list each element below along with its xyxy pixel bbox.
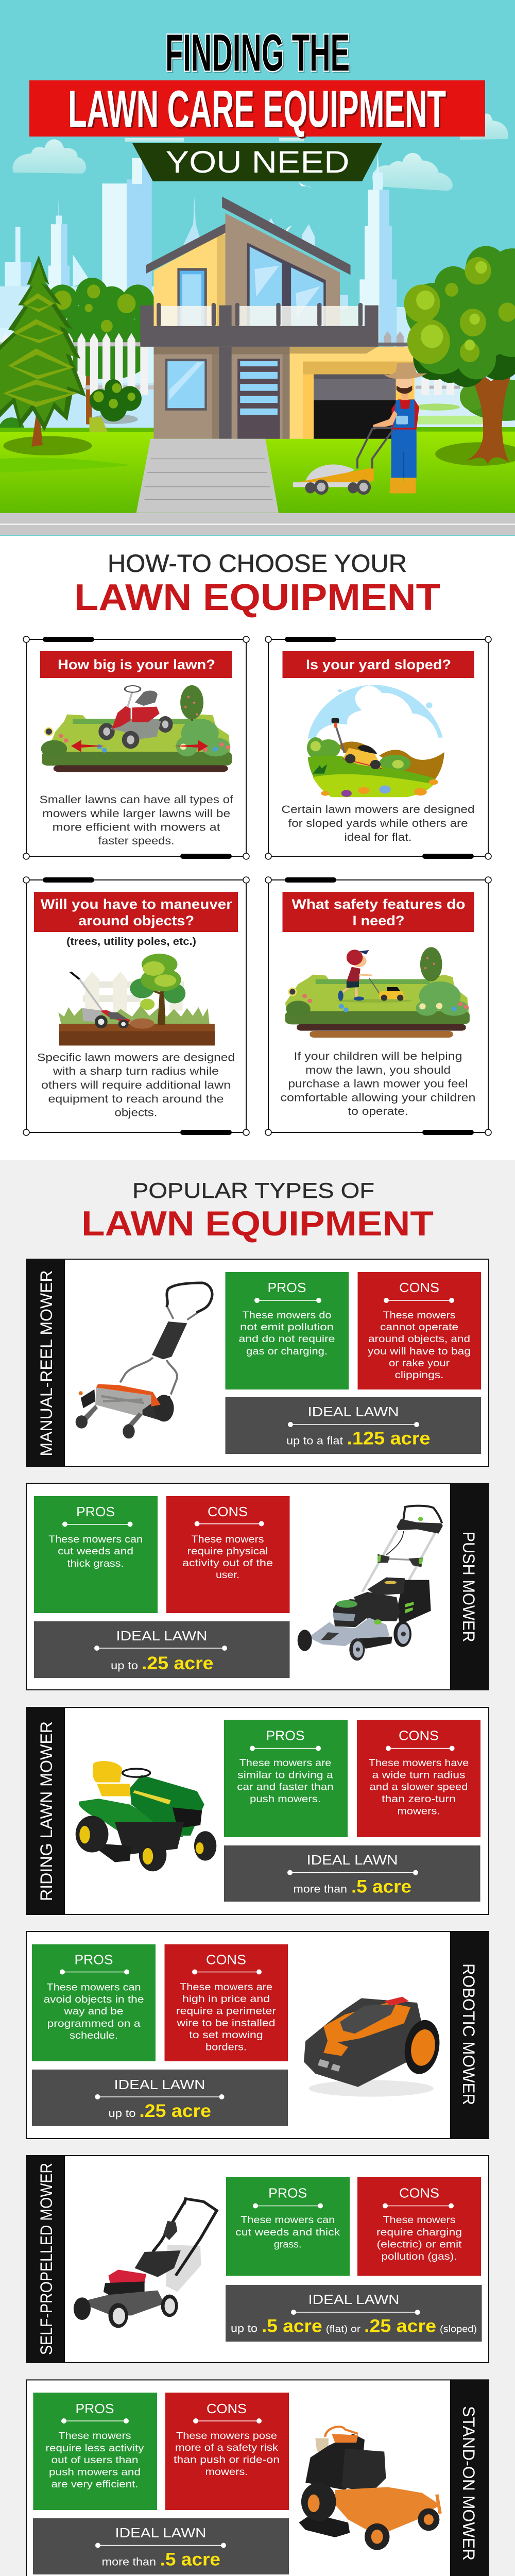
pros: [226, 2177, 350, 2276]
gray section background: [0, 1160, 515, 2576]
panel: robotic mower: [26, 1931, 489, 2139]
body text: more efficient with mowers at: [53, 821, 220, 834]
side label: PUSH MOWER: [459, 1531, 478, 1642]
cons: and a slower speed: [370, 1782, 468, 1793]
cons: require charging: [376, 2227, 462, 2238]
pros: PROS: [75, 2401, 114, 2416]
ideal lawn: (flat) or: [326, 2324, 360, 2334]
right fence: [416, 376, 460, 395]
mower image: [76, 1761, 216, 1871]
cons: CONS: [399, 1727, 439, 1743]
ideal lawn: .25 acre: [139, 2101, 211, 2121]
side label: RIDING LAWN MOWER: [37, 1721, 56, 1901]
section heading: how-to choose: [74, 550, 440, 618]
body text: equipment to reach around the: [48, 1093, 224, 1105]
panel: riding lawn mower: [26, 1707, 489, 1915]
cons: [357, 1272, 481, 1389]
ideal lawn: IDEAL LAWN: [308, 1404, 399, 1419]
body text: objects.: [114, 1107, 158, 1119]
arrow: left: [71, 740, 106, 752]
ideal lawn: [226, 2285, 482, 2342]
side label: [26, 1259, 65, 1467]
side label: MANUAL-REEL MOWER: [37, 1270, 56, 1456]
pros: not emit pollution: [240, 1321, 334, 1333]
pros: These mowers can: [241, 2214, 335, 2226]
body text: with a sharp turn radius while: [53, 1065, 219, 1077]
ideal lawn: more than: [294, 1884, 347, 1895]
header: [282, 892, 474, 932]
ideal lawn: IDEAL LAWN: [116, 1628, 207, 1643]
cons: These mowers: [383, 1310, 456, 1321]
pros: These mowers are: [239, 1757, 331, 1769]
pros: gas or charging.: [246, 1346, 328, 1357]
pros: push mowers.: [250, 1793, 321, 1805]
cons: user.: [216, 1569, 239, 1581]
back bush and tree: [46, 278, 159, 425]
side label: ROBOTIC MOWER: [459, 1963, 478, 2105]
panel: manual-reel mower: [26, 1259, 489, 1467]
pros: cut weeds and: [58, 1546, 133, 1557]
pine tree: [0, 256, 86, 447]
pros: and do not require: [239, 1333, 335, 1345]
pros: These mowers do: [242, 1310, 332, 1321]
pros: [224, 1720, 348, 1837]
small left bush: [0, 417, 30, 448]
body text: [37, 1052, 235, 1119]
cons: than zero-turn: [382, 1793, 456, 1805]
mower image: [299, 2427, 440, 2550]
hero illustration: [0, 0, 515, 536]
cons: [357, 2177, 481, 2276]
panel: is your yard sloped: [265, 636, 491, 859]
panel: self-propelled mower: [26, 2155, 489, 2363]
arrow: right: [174, 740, 208, 752]
mower image: [298, 1506, 443, 1660]
clouds: [13, 113, 508, 191]
ribbon: [132, 143, 382, 181]
cons: require a perimeter: [176, 2006, 277, 2017]
cons: mowers.: [398, 1805, 440, 1817]
ideal lawn: IDEAL LAWN: [308, 2292, 400, 2307]
cons: borders.: [205, 2042, 247, 2053]
mower image: [76, 1283, 212, 1438]
cons: CONS: [206, 1952, 246, 1968]
ideal lawn: .125 acre: [347, 1429, 431, 1449]
pros: PROS: [268, 2185, 307, 2200]
mower image: [304, 1997, 443, 2097]
side label: [26, 2155, 65, 2363]
ideal lawn: [32, 2070, 288, 2126]
cons: CONS: [207, 2401, 247, 2416]
pros: These mowers can: [46, 1982, 141, 1993]
pros: push mowers and: [49, 2467, 141, 2478]
ideal lawn: up to: [231, 2323, 258, 2335]
pros: These mowers can: [48, 1534, 143, 1545]
section heading: how-to choose: HOW-TO CHOOSE YOUR: [108, 550, 407, 578]
body text: others will require additional lawn: [41, 1079, 231, 1091]
question: [291, 896, 466, 928]
ideal lawn: IDEAL LAWN: [307, 1852, 398, 1868]
panel: how big is your lawn: [23, 636, 249, 859]
header: [40, 651, 232, 678]
header: [34, 892, 238, 932]
birds: [272, 182, 312, 236]
cons: clippings.: [394, 1369, 444, 1381]
body text: [280, 1050, 476, 1117]
panel: safety features: [265, 877, 491, 1136]
body text: Smaller lawns can have all types of: [40, 794, 233, 806]
pros: avoid objects in the: [43, 1994, 144, 2005]
question: Will you have to maneuver: [41, 896, 232, 912]
ideal lawn: IDEAL LAWN: [114, 2077, 205, 2092]
pros: require less activity: [45, 2443, 144, 2454]
question: [41, 896, 232, 928]
side label: [450, 1483, 489, 1690]
section heading: popular types: [81, 1178, 434, 1243]
question: What safety features do: [291, 896, 466, 912]
illustration: riding mower on lawn: [41, 685, 232, 772]
side label: [450, 2379, 489, 2576]
cons: These mowers are: [180, 1981, 272, 1993]
body text: ideal for flat.: [344, 832, 412, 843]
pros: programmed on a: [47, 2018, 141, 2029]
panel: stand-on mower: [26, 2379, 489, 2576]
ideal lawn: [33, 2518, 289, 2574]
cons: or rake your: [389, 1358, 450, 1369]
ideal lawn: (sloped): [440, 2324, 477, 2334]
cons: CONS: [399, 1280, 439, 1295]
cons: These mowers have: [369, 1757, 469, 1769]
ideal lawn: .5 acre: [160, 2549, 220, 2570]
road: [0, 513, 515, 535]
ideal lawn: .25 acre: [142, 1653, 213, 1673]
ideal lawn: [226, 1397, 481, 1454]
cons: around objects, and: [368, 1333, 470, 1345]
pros: out of users than: [52, 2454, 138, 2466]
ideal lawn: [34, 1621, 289, 1678]
body text: Specific lawn mowers are designed: [37, 1052, 235, 1063]
body text: [40, 794, 233, 847]
side label: [450, 1931, 489, 2139]
body text: mowers while larger lawns will be: [42, 808, 230, 820]
title line: finding the: FINDING THE: [165, 24, 350, 82]
body text: for sloped yards while others are: [288, 818, 468, 829]
body text: [281, 804, 475, 843]
body text: If your children will be helping: [294, 1050, 462, 1062]
cons: [165, 1944, 288, 2061]
body text: Certain lawn mowers are designed: [281, 804, 475, 816]
panel: maneuver around objects: [23, 877, 249, 1136]
body text: mow the lawn, you should: [305, 1064, 451, 1076]
section heading: popular types: POPULAR TYPES OF: [132, 1178, 374, 1202]
front bush: [90, 379, 142, 424]
ideal lawn: IDEAL LAWN: [115, 2525, 206, 2540]
pros: are very efficient.: [52, 2479, 138, 2490]
title banner: [29, 80, 485, 137]
pros: PROS: [74, 1952, 113, 1968]
pros: [226, 1272, 349, 1389]
cons: a wide turn radius: [372, 1769, 466, 1781]
pros: [33, 2393, 157, 2510]
side label: [26, 1707, 65, 1915]
ideal lawn: more than: [102, 2556, 156, 2568]
cons: wire to be installed: [176, 2018, 275, 2029]
illustration: child mowing: [285, 947, 470, 1038]
pros: car and faster than: [237, 1782, 334, 1793]
ideal lawn: [224, 1845, 480, 1902]
cons: activity out of the: [182, 1557, 273, 1569]
cons: mowers.: [205, 2466, 248, 2478]
body text: faster speeds.: [98, 835, 175, 847]
mower image: [74, 2199, 217, 2328]
pros: PROS: [268, 1280, 306, 1295]
house: [140, 197, 415, 439]
cons: pollution (gas).: [381, 2251, 457, 2262]
pros: similar to driving a: [237, 1769, 333, 1781]
pros: thick grass.: [67, 1558, 124, 1569]
pros: [32, 1944, 156, 2061]
cons: These mowers: [383, 2214, 456, 2226]
side label: STAND-ON MOWER: [459, 2406, 478, 2561]
illustration: mower on slope: [307, 685, 444, 797]
pros: PROS: [266, 1727, 305, 1743]
lawn: [0, 428, 515, 513]
ideal lawn: .5 acre: [351, 1877, 411, 1897]
section heading: popular types: LAWN EQUIPMENT: [81, 1204, 434, 1243]
side label: SELF-PROPELLED MOWER: [37, 2163, 56, 2355]
cons: [166, 1496, 289, 1613]
title line: you need: YOU NEED: [166, 145, 349, 179]
skyline: [0, 152, 515, 431]
ideal lawn: .25 acre: [364, 2316, 436, 2336]
body text: purchase a lawn mower you feel: [288, 1078, 468, 1090]
cons: high in price and: [182, 1993, 270, 2005]
pros: way and be: [63, 2006, 124, 2017]
fence: [0, 333, 154, 395]
ideal lawn: up to: [111, 1660, 138, 1672]
pros: schedule.: [70, 2030, 118, 2041]
cons: cannot operate: [380, 1321, 458, 1333]
question: I need?: [352, 913, 405, 928]
note: (trees, utility poles, etc.): [66, 936, 196, 947]
cons: [357, 1720, 480, 1837]
pros: grass.: [274, 2239, 302, 2250]
pros: cut weeds and thick: [235, 2227, 340, 2238]
panel: push mower: [26, 1483, 489, 1690]
cons: These mowers: [192, 1534, 264, 1545]
question: around objects?: [78, 913, 194, 928]
lawn mower: [293, 428, 392, 495]
right tree: [404, 246, 515, 464]
ideal lawn: .5 acre: [262, 2316, 322, 2336]
pros: PROS: [76, 1504, 115, 1519]
cons: CONS: [208, 1504, 248, 1519]
body text: comfortable allowing your children: [280, 1092, 476, 1104]
title: [29, 24, 485, 181]
cons: more of a safety risk: [175, 2442, 278, 2453]
cons: than push or ride-on: [174, 2454, 280, 2466]
illustration: mower by tree and fence: [58, 954, 215, 1045]
cons: you will have to bag: [368, 1346, 471, 1357]
section heading: how-to choose: LAWN EQUIPMENT: [74, 577, 440, 618]
pros: [34, 1496, 158, 1613]
cons: (electric) or emit: [377, 2239, 462, 2250]
ideal lawn: up to: [108, 2108, 136, 2120]
question: How big is your lawn?: [58, 657, 215, 672]
cons: require physical: [187, 1546, 268, 1557]
question: Is your yard sloped?: [306, 657, 451, 672]
gardener: [373, 363, 427, 494]
cons: CONS: [399, 2185, 439, 2200]
cons: to set mowing: [189, 2029, 263, 2041]
pros: These mowers: [59, 2430, 131, 2442]
header: [282, 651, 474, 678]
body text: to operate.: [348, 1106, 408, 1117]
cons: [165, 2393, 289, 2510]
ideal lawn: up to a flat: [286, 1435, 343, 1447]
cons: These mowers pose: [176, 2430, 277, 2442]
horizon water: [0, 383, 154, 428]
walkway: [136, 439, 279, 513]
